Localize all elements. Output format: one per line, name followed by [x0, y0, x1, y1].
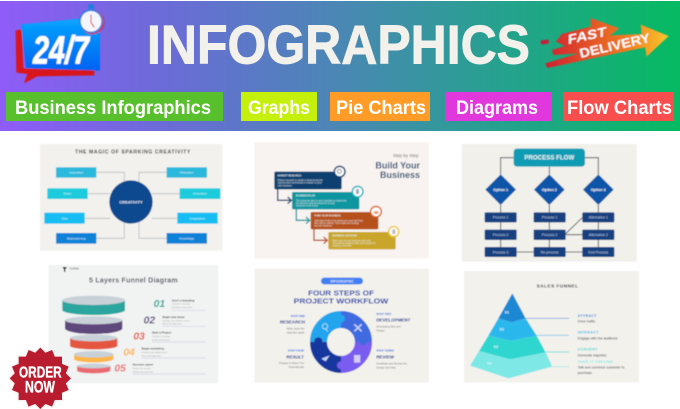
panel: 5 layers funnel diagram: 01 — [154, 299, 165, 310]
icon: fast delivery arrows — [540, 18, 669, 68]
category: Graphs — [241, 92, 317, 121]
panel: sales funnel pyramid: 03 — [494, 344, 499, 349]
badge: order now: NOW — [25, 378, 55, 397]
panel: creativity mind map: Knowledge — [179, 237, 194, 241]
panel: sales funnel pyramid: INTERACT — [578, 331, 599, 335]
panel: four steps of project workflow: REVIEW — [376, 355, 395, 360]
panel: four steps of project workflow: RESULT — [286, 355, 304, 360]
panel: 5 layers funnel diagram: 02 — [144, 316, 155, 327]
category: Diagrams: Diagrams — [456, 97, 538, 119]
panel: four steps of project workflow: Prepare & Share The — [279, 361, 305, 365]
panel: 5 layers funnel diagram: Develop and validate plans — [142, 351, 168, 354]
panel: four steps of project workflow: STEP TWO — [376, 312, 392, 316]
panel: 5 layers funnel diagram: Don't a branding — [172, 298, 195, 302]
panel: build your business steps: as your business — [314, 225, 333, 228]
panel: build your business steps: the direction and development of your — [296, 202, 335, 205]
panel: process flow chart: Alternative 1 — [589, 216, 608, 220]
panel: four steps of project workflow: Feedback and Review the — [376, 362, 408, 366]
panel: sales funnel pyramid: SALES FUNNEL — [537, 283, 578, 288]
panel: sales funnel pyramid: Drive traffic — [578, 320, 595, 324]
panel: build your business steps: competitors analysis while your location is — [332, 242, 376, 245]
panel: creativity mind map: Motivation — [180, 171, 194, 175]
panel: process flow chart: Re-process — [541, 250, 559, 254]
panel: creativity mind map — [40, 144, 222, 251]
panel: sales funnel pyramid: TAKE IT OFFLINE — [578, 360, 613, 364]
panel: build your business steps — [254, 142, 429, 258]
panel: four steps of project workflow: Final Results — [289, 365, 305, 369]
panel: 5 layers funnel diagram: Success report — [133, 362, 153, 366]
panel: build your business steps: they will be utilized. Then make the funding — [314, 222, 360, 225]
panel: build your business steps: opportunities and threats in relation to your — [278, 182, 322, 185]
panel: 5 layers funnel diagram: 03 — [133, 331, 145, 342]
panel: sales funnel pyramid: 02 — [500, 327, 505, 332]
panel: build your business steps: FUND YOUR BUSINESS — [314, 216, 341, 218]
panel: four steps of project workflow: FOUR STEPS OF — [308, 288, 374, 297]
panel: 5 layers funnel diagram: ideas and objectives — [162, 323, 182, 326]
panel: process flow chart: Option 1 — [493, 188, 508, 192]
panel: creativity mind map: Vision — [63, 192, 72, 196]
icon: fast delivery arrows: FAST — [566, 24, 609, 47]
panel: build your business steps: BUSINESS PLAN — [296, 195, 315, 198]
panel: 5 layers funnel diagram: branding market plan — [172, 306, 193, 309]
panel: sales funnel pyramid: CONVERT — [578, 348, 598, 352]
panel: sales funnel pyramid: ATTRACT — [578, 314, 597, 318]
panel: process flow chart — [462, 144, 637, 262]
panel: 5 layers funnel diagram: 04 — [123, 347, 135, 358]
panel: 5 layers funnel diagram: Begin new ideas — [162, 315, 185, 319]
panel: process flow chart: PROCESS FLOW — [524, 155, 574, 162]
panel: process flow chart: Process 1 — [493, 216, 508, 220]
panel: four steps of project workflow: DEVELOPMENT — [376, 318, 411, 323]
panel: build your business steps: Calculate funds to be raised you need and how — [314, 219, 363, 222]
panel: 5 layers funnel diagram: Consult or manage — [152, 335, 171, 338]
panel: four steps of project workflow: STEP THREE — [376, 349, 394, 353]
panel: four steps of project workflow: INFOGRAPHIC — [330, 279, 354, 283]
panel: four steps of project workflow: STEP FOUR — [288, 349, 304, 353]
category: Graphs: Graphs — [248, 97, 310, 119]
panel: sales funnel pyramid: Generate Inquiries — [578, 353, 607, 357]
panel: build your business steps: Make sure of your business plan and — [332, 239, 371, 242]
category: Flow Charts: Flow Charts — [567, 97, 672, 119]
panel: build your business steps: own business — [278, 185, 293, 187]
panel: process flow chart: Alternative 2 — [589, 233, 608, 237]
panel: creativity mind map: Brainstorming — [67, 237, 86, 241]
panel: process flow chart: Process 1 — [542, 216, 557, 220]
panel: creativity mind map: THE MAGIC OF SPARKING CREATIVITY — [75, 150, 191, 156]
panel: sales funnel pyramid: Talk and convince customer to — [578, 366, 625, 370]
panel: 5 layers funnel diagram: 05 — [114, 363, 126, 374]
panel: build your business steps: Step by Step — [393, 153, 419, 158]
panel: build your business steps: business in the future — [296, 205, 319, 208]
panel: four steps of project workflow: Developing Idea and — [376, 325, 401, 329]
panel: build your business steps: Market research is useful in determining the — [278, 179, 324, 182]
category: Pie Charts: Pie Charts — [336, 97, 426, 119]
icon: 24/7 speech bubble with stopwatch: 24/7 — [32, 29, 91, 72]
panel: 5 layers funnel diagram: details of business — [152, 338, 170, 341]
icon: fast delivery arrows: DELIVERY — [578, 30, 652, 61]
panel: 5 layers funnel diagram: 5 Layers Funnel Diagram — [89, 277, 178, 284]
badge: order now: ORDER — [19, 364, 62, 381]
panel: build your business steps: strategic, accurate — [332, 245, 352, 248]
panel: build your business steps: MARKET RESEARCH — [278, 175, 302, 178]
panel: 5 layers funnel diagram: details and report this — [133, 370, 153, 373]
panel: process flow chart: Process 2 — [493, 233, 508, 237]
panel: build your business steps: BUSINESS LOCATION — [332, 235, 357, 238]
category: Diagrams — [445, 92, 552, 121]
panel: 5 layers funnel diagram: Expect the success — [133, 367, 151, 370]
panel: four steps of project workflow: Write down the — [287, 326, 305, 330]
panel: process flow chart: Process 2 — [542, 233, 557, 237]
title: INFOGRAPHICS — [147, 14, 530, 76]
panel: four steps of project workflow — [254, 269, 429, 383]
panel: creativity mind map: Innovation — [193, 192, 207, 196]
category: Business Infographics: Business Infographics — [15, 97, 211, 119]
panel: four steps of project workflow: RESEARCH — [280, 320, 305, 325]
panel: process flow chart: Option 3 — [591, 188, 606, 192]
panel: four steps of project workflow: Design — [376, 329, 385, 333]
panel: 5 layers funnel diagram: Start a Project — [152, 330, 171, 334]
panel: sales funnel pyramid: purchase — [578, 371, 592, 375]
panel: creativity mind map: Imagination — [190, 216, 205, 220]
panel: 5 layers funnel diagram: Develop and validate various — [162, 319, 190, 322]
panel: 5 layers funnel diagram: Consult or manage — [172, 303, 191, 306]
panel: creativity mind map: Idea — [62, 216, 68, 220]
panel: build your business steps: Build Your — [375, 161, 420, 171]
panel: process flow chart: Process 3 — [493, 250, 508, 254]
panel: 5 layers funnel diagram: focus and objectives — [142, 354, 161, 357]
panel: 5 layers funnel diagram: Begin marketing — [142, 346, 164, 350]
panel: four steps of project workflow: Design and Idea — [376, 366, 396, 370]
panel: sales funnel pyramid: 01 — [505, 310, 510, 315]
panel: build your business steps: Business — [380, 170, 420, 180]
panel: 5 layers funnel diagram: FUNNEL — [69, 268, 80, 271]
panel: 5 layers funnel diagram — [48, 265, 218, 383]
panel: creativity mind map: CREATIVITY — [119, 199, 143, 204]
panel: sales funnel pyramid: 04 — [487, 360, 493, 365]
panel: four steps of project workflow: STEP ONE — [291, 314, 305, 318]
panel: creativity mind map: Inspiration — [69, 171, 84, 175]
badge: order now — [8, 346, 73, 409]
icon: 24/7 speech bubble with stopwatch — [16, 4, 104, 83]
panel: sales funnel pyramid — [464, 271, 639, 382]
panel: sales funnel pyramid: Engage with the audience — [578, 337, 618, 341]
banner background — [0, 1, 680, 131]
panel: build your business steps: This business plan is very important to determine — [296, 199, 347, 202]
panel: process flow chart: Option 2 — [542, 188, 557, 192]
panel: process flow chart: End Process — [588, 250, 608, 254]
panel: four steps of project workflow: objective goals — [287, 330, 305, 334]
panel: four steps of project workflow: PROJECT WORKFLOW — [294, 297, 389, 306]
